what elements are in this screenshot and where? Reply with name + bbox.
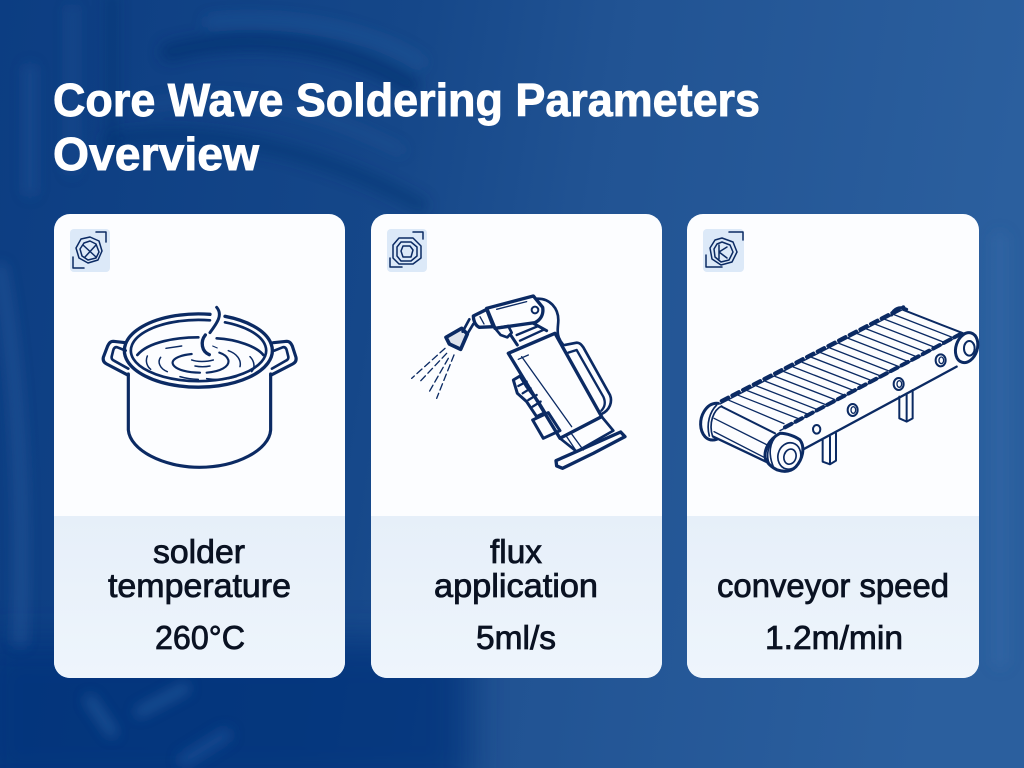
- label: solder: [153, 533, 245, 570]
- card background: [371, 214, 662, 678]
- icon: flux spray gun: [412, 296, 625, 468]
- icon: badge: [70, 229, 110, 272]
- caption background: [687, 516, 979, 678]
- panel: conveyor speed: [687, 214, 982, 678]
- value: 260°C: [155, 619, 245, 656]
- icon: badge: [703, 229, 744, 272]
- background shading: lower left: [0, 640, 470, 768]
- card background: [54, 214, 345, 678]
- value: 1.2m/min: [765, 619, 903, 656]
- icon: conveyor belt: [701, 307, 982, 472]
- label: conveyor speed: [717, 567, 949, 604]
- card background: [687, 214, 979, 678]
- caption background: [54, 516, 345, 678]
- caption background: [371, 516, 662, 678]
- value: 5ml/s: [476, 619, 556, 656]
- panel: solder temperature: [54, 214, 345, 678]
- title: [53, 74, 760, 180]
- icon: badge: [387, 229, 427, 272]
- title: Overview: [53, 128, 259, 180]
- label: [108, 533, 291, 604]
- label: application: [434, 567, 598, 604]
- label: flux: [490, 533, 542, 570]
- title: Core Wave Soldering Parameters: [53, 74, 760, 126]
- label: [434, 533, 598, 604]
- label: temperature: [108, 567, 291, 604]
- icon: pot of molten solder: [103, 307, 296, 467]
- panel: flux application: [371, 214, 662, 678]
